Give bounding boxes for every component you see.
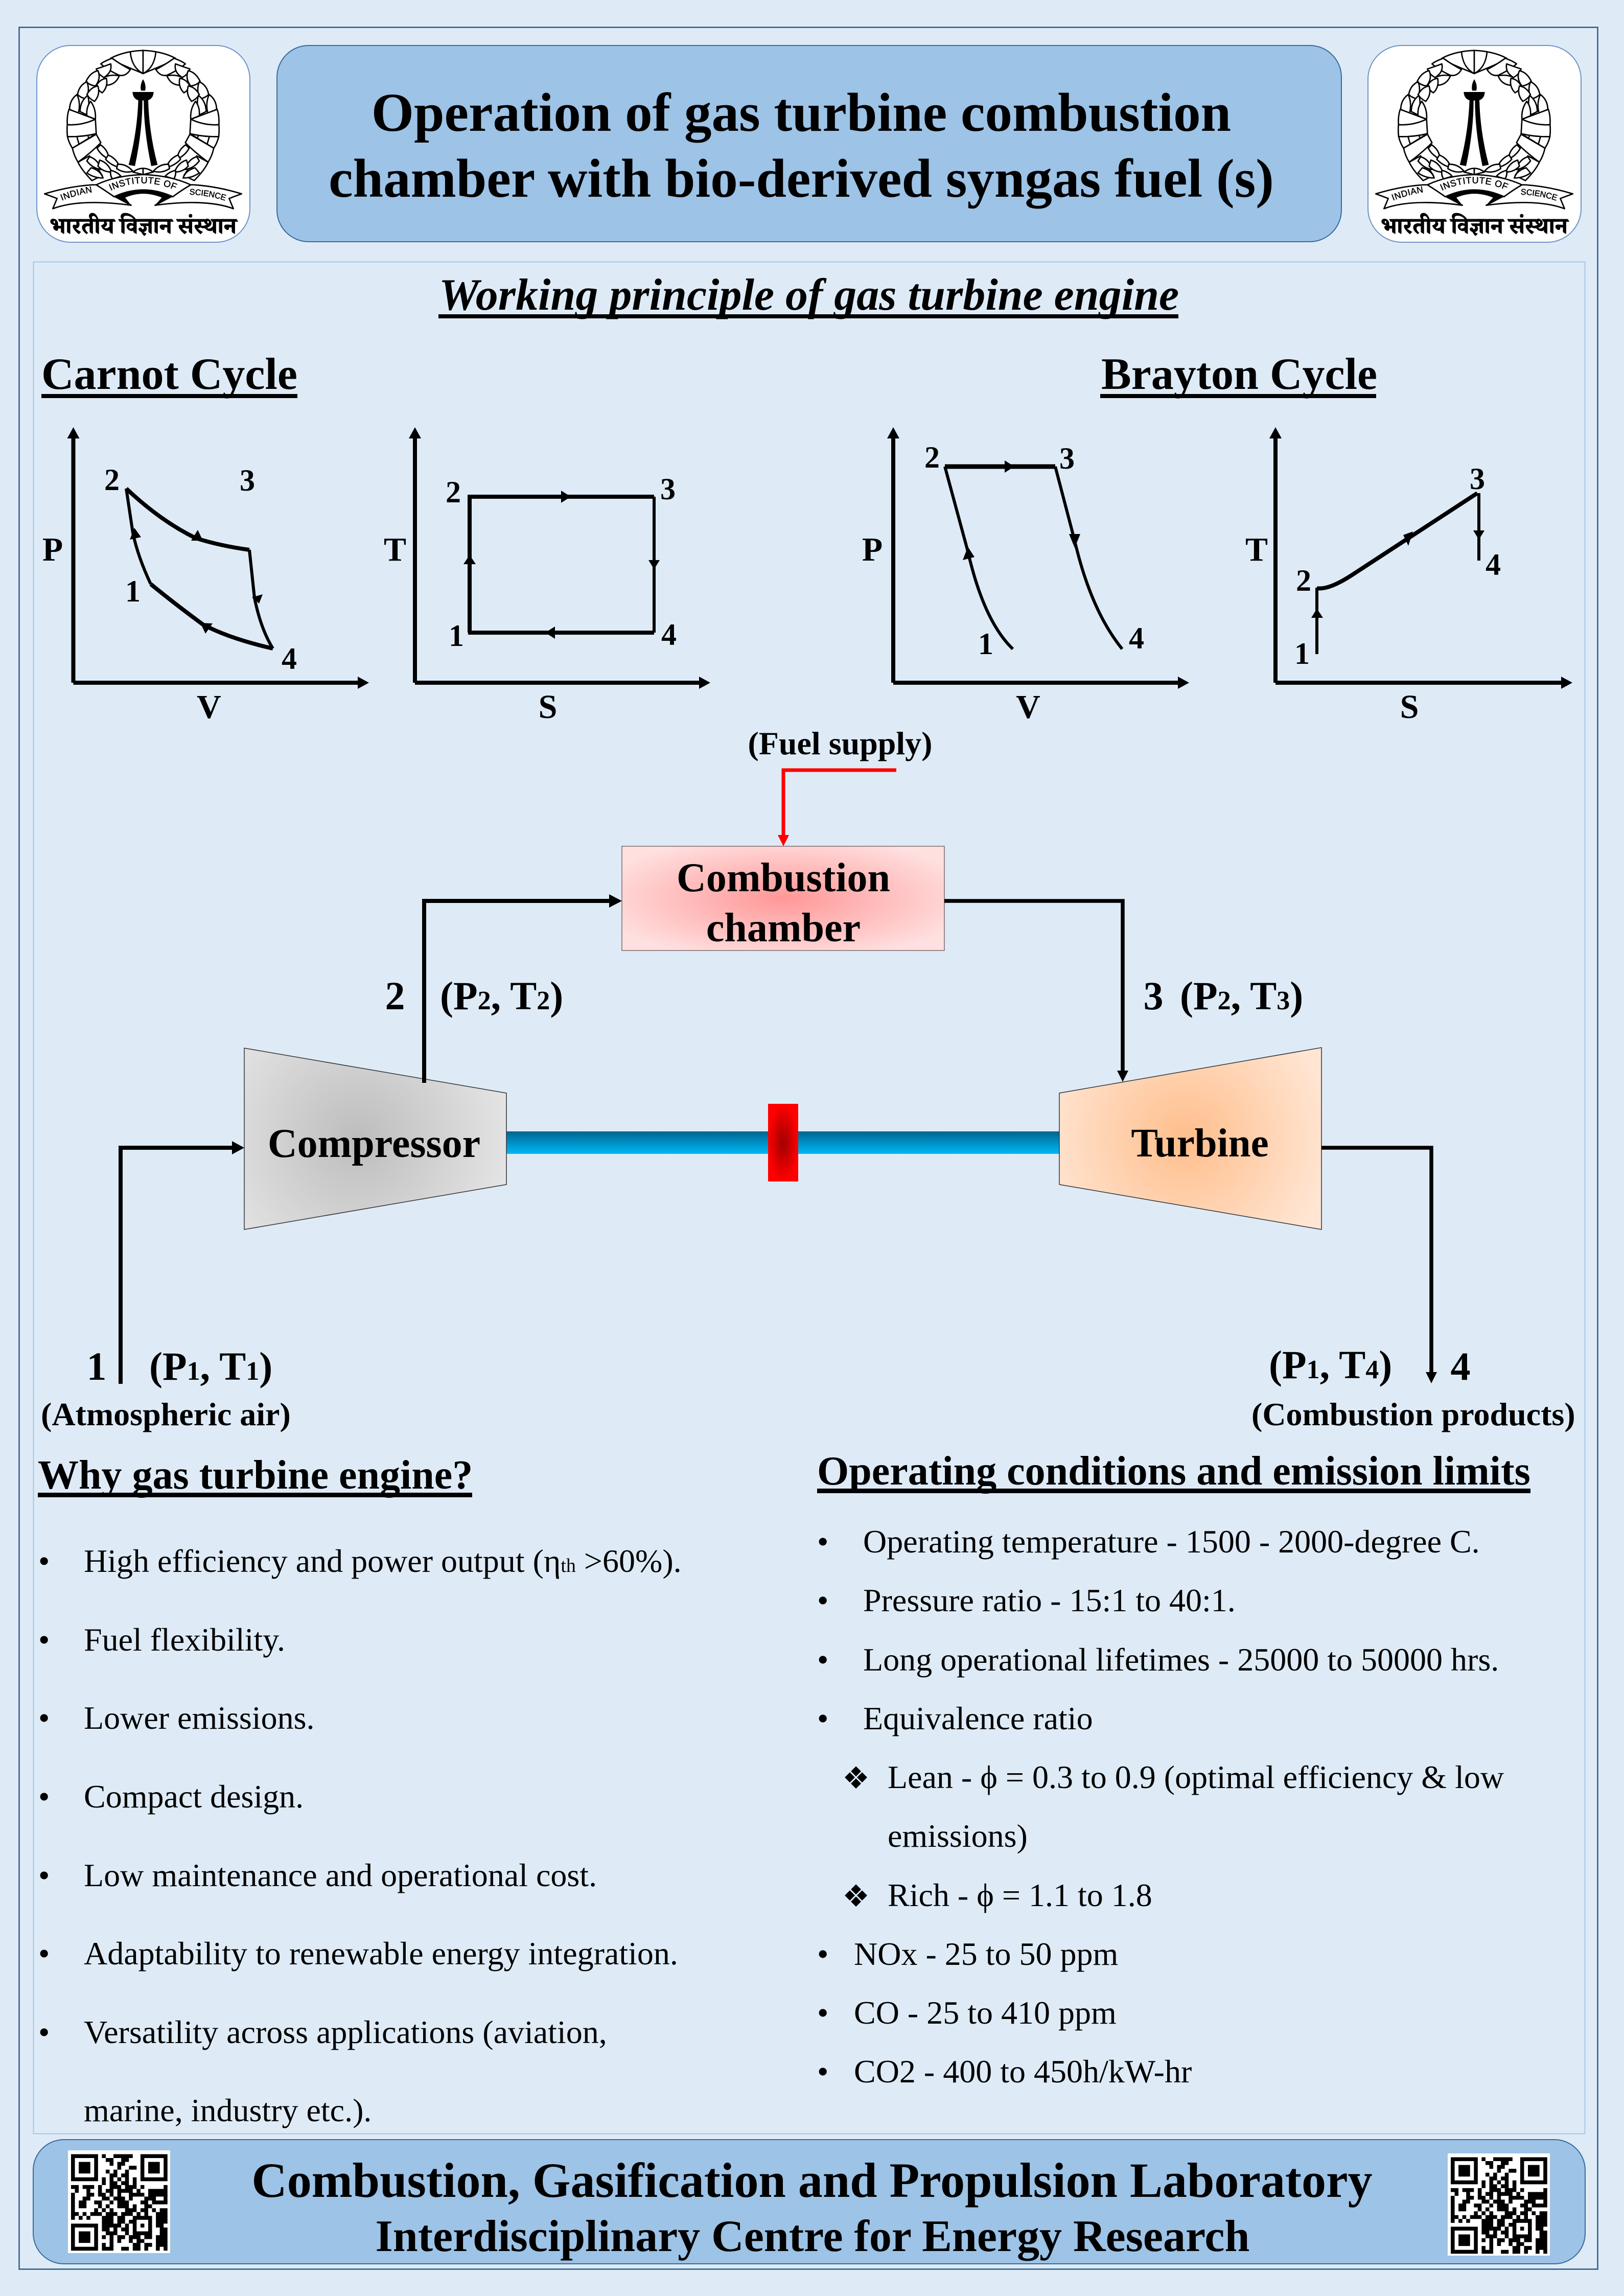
heading: operating conditions: Operating conditions and emission limits [817,1449,1530,1494]
title box: Operation of gas turbine combustion [372,83,1231,143]
turbine [1059,1048,1321,1230]
bullet list: reasons: High efficiency and power output (ηth >60%). [84,1543,682,1579]
state label 1: 1 [87,1344,106,1388]
chart: Carnot P-V diagram: 2 [104,463,120,497]
chart: Brayton T-S diagram: 4 [1486,548,1501,582]
bullet list: reasons: Compact design. [84,1778,304,1815]
bullet list: operating conditions: • [817,1523,828,1560]
chart: Carnot T-S diagram: 3 [660,472,676,506]
arrow: fuel supply [778,770,896,846]
QR code: right [1448,2153,1550,2256]
bullet list: reasons: • [38,1857,50,1893]
combustion chamber [622,846,944,950]
heading: why gas turbine engine: Why gas turbine engine? [38,1453,473,1498]
bullet list: operating conditions: Operating temperature - 1500 - 2000-degree C. [863,1523,1480,1560]
chart: Brayton T-S diagram: 3 [1470,462,1485,496]
chart: Carnot T-S diagram: 2 [446,475,461,509]
bullet list: operating conditions: Rich - ϕ = 1.1 to 1.8 [888,1877,1152,1913]
bullet list: operating conditions: • [817,1936,828,1972]
chart: Carnot P-V diagram: 4 [282,642,297,676]
label: fuel supply: (Fuel supply) [748,725,932,761]
bullet list: operating conditions: • [817,1994,828,2031]
arrow: compressor to chamber [424,894,622,1083]
chart: Carnot T-S diagram: S [539,688,557,726]
chart: Brayton T-S diagram: 2 [1296,564,1311,597]
shaft [506,1131,1060,1154]
chart: Brayton P-V diagram: 4 [1129,621,1144,655]
turbine: Turbine [1131,1121,1269,1166]
chart: Brayton T-S diagram: T [1245,531,1268,568]
heading: Brayton cycle: Brayton Cycle [1101,350,1377,399]
chart: Carnot P-V diagram: V [197,688,221,726]
chart: Carnot T-S diagram: 1 [449,619,464,653]
state label 1 [87,1344,272,1388]
bullet list: reasons: • [38,1621,50,1658]
bullet list: operating conditions: Equivalence ratio [863,1700,1093,1736]
logo: right Indian Institute of Science emblem: SCIENCE [1521,189,1558,201]
bullet list: operating conditions: ❖ [842,1760,870,1796]
state label 2: 2 [385,973,405,1018]
logo: left Indian Institute of Science emblem: INSTITUTE OF [108,177,178,191]
state label 3: 3 [1144,973,1163,1018]
state label 2: (P2, T2) [440,973,563,1018]
bullet list: reasons: • [38,1778,50,1815]
chart: Brayton P-V diagram: 2 [924,440,940,474]
chart: Carnot P-V diagram: P [42,531,63,568]
bullet list: reasons: marine, industry etc.). [84,2092,372,2128]
bullet list: reasons: • [38,1543,50,1579]
chart: Carnot T-S diagram: 4 [661,618,677,652]
logo: left Indian Institute of Science emblem: SCIENCE [190,189,226,201]
chart: Carnot P-V diagram: 3 [240,463,255,497]
chart: Brayton T-S diagram: S [1400,688,1419,726]
logo: right Indian Institute of Science emblem [1367,45,1582,243]
state label 4: (P1, T4) [1269,1342,1392,1387]
chart: Brayton T-S diagram [1245,427,1572,726]
state label 2 [385,973,563,1018]
bullet list: operating conditions: • [817,1700,828,1736]
bullet list: reasons: • [38,1700,50,1736]
logo: left Indian Institute of Science emblem [36,45,250,243]
chart: Brayton P-V diagram: 1 [978,627,993,661]
QR code: left [68,2150,170,2253]
bullet list: operating conditions: NOx - 25 to 50 ppm [854,1936,1118,1972]
state label 4: 4 [1450,1344,1471,1388]
footer text: Interdisciplinary Centre for Energy Research [376,2212,1249,2261]
combustion chamber: Combustion [677,855,890,900]
compressor: Compressor [268,1121,480,1166]
compressor [244,1048,506,1230]
logo: right Indian Institute of Science emblem: INSTITUTE OF [1440,177,1509,191]
logo: left Indian Institute of Science emblem: भारतीय विज्ञान संस्थान [50,213,238,239]
bullet list: reasons: Low maintenance and operational cost. [84,1857,597,1893]
chart: Brayton P-V diagram: 3 [1059,442,1075,475]
logo: right Indian Institute of Science emblem: INDIAN [1391,186,1423,200]
label: atmospheric air: (Atmospheric air) [41,1396,291,1432]
title box [277,45,1341,242]
bullet list: reasons: Lower emissions. [84,1700,315,1736]
chart: Brayton P-V diagram: P [862,531,883,568]
label: combustion products: (Combustion products) [1251,1396,1575,1432]
logo: right Indian Institute of Science emblem: भारतीय विज्ञान संस्थान [1381,213,1569,239]
arrow: chamber to turbine [944,901,1128,1082]
state label 1: (P1, T1) [149,1344,272,1388]
arrow: air inlet [121,1141,244,1384]
bullet list: reasons [38,1543,682,2128]
section: operating conditions [817,1449,1530,2090]
combustion chamber: chamber [706,906,861,950]
bullet list: reasons: Versatility across applications (aviation, [84,2014,607,2050]
heading: Carnot cycle: Carnot Cycle [41,350,297,399]
bullet list: reasons: Adaptability to renewable energy integration. [84,1935,678,1972]
chart: Brayton T-S diagram: 1 [1294,637,1310,670]
logo: left Indian Institute of Science emblem: INDIAN [60,186,92,200]
chart: Carnot T-S diagram: T [384,531,406,568]
bullet list: operating conditions: Long operational lifetimes - 25000 to 50000 hrs. [863,1641,1499,1678]
bullet list: operating conditions: Lean - ϕ = 0.3 to 0.9 (optimal efficiency & low [888,1759,1504,1795]
bullet list: operating conditions: Pressure ratio - 15:1 to 40:1. [863,1582,1236,1618]
content panel [34,262,1585,2134]
footer bar [33,2140,1585,2264]
bullet list: reasons: Fuel flexibility. [84,1621,285,1658]
footer text [251,2153,1373,2261]
chart: Carnot T-S diagram [384,427,710,726]
bullet list: operating conditions [817,1523,1504,2090]
bullet list: operating conditions: • [817,2053,828,2090]
chart: Carnot P-V diagram [42,427,369,726]
heading: working principle: Working principle of gas turbine engine [439,270,1179,320]
bullet list: operating conditions: ❖ [842,1878,870,1914]
bullet list: operating conditions: • [817,1641,828,1678]
chart: Brayton P-V diagram: V [1016,688,1040,726]
arrow: exhaust [1321,1148,1437,1383]
bullet list: operating conditions: CO2 - 400 to 450h/kW-hr [854,2053,1192,2090]
state label 4 [1269,1342,1471,1388]
bullet list: operating conditions: CO - 25 to 410 ppm [854,1994,1117,2031]
bullet list: reasons: • [38,1935,50,1972]
state label 3: (P2, T3) [1180,973,1303,1018]
bullet list: operating conditions: • [817,1582,828,1618]
bullet list: operating conditions: emissions) [888,1818,1028,1854]
chart: Brayton P-V diagram [862,427,1189,726]
footer text: Combustion, Gasification and Propulsion Laboratory [251,2153,1373,2208]
chart: Carnot P-V diagram: 1 [125,574,141,608]
title box: chamber with bio-derived syngas fuel (s) [329,149,1274,209]
bullet list: reasons: • [38,2014,50,2050]
section: why gas turbine engine [38,1453,682,2128]
shaft coupling [768,1104,798,1181]
